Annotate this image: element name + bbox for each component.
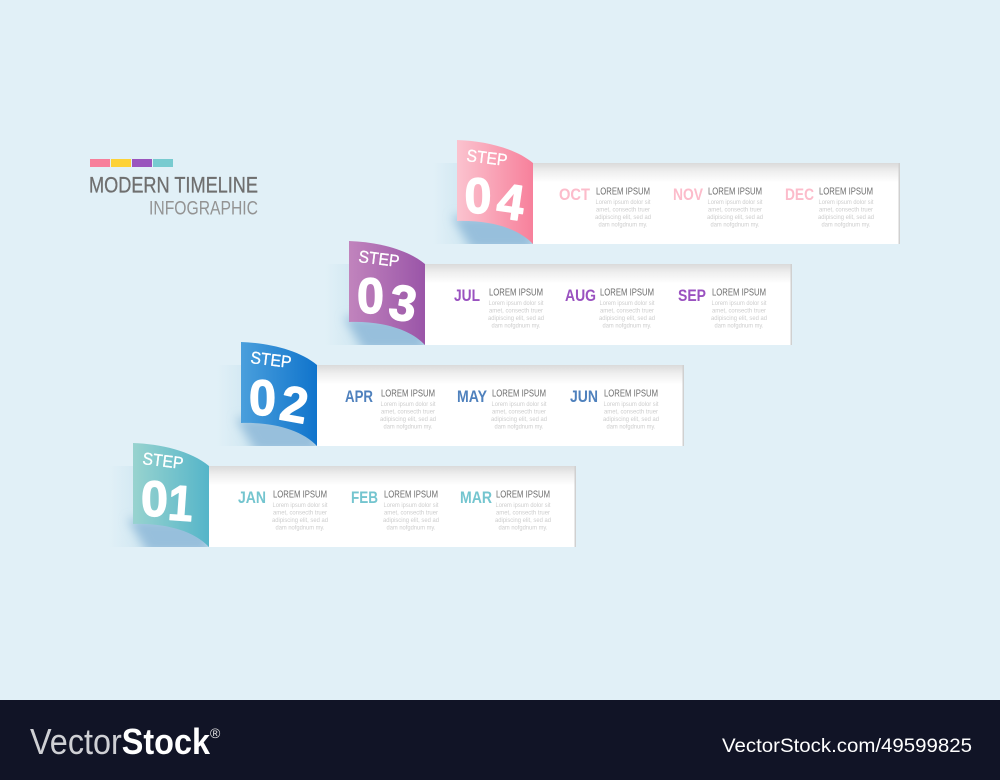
step 01 row [109,443,576,553]
month columns: LOREM IPSUM [489,288,543,298]
month columns: amet, consecth truer [708,206,762,214]
month columns: amet, consecth truer [712,308,766,314]
ribbon tab: 4 [493,172,528,232]
month columns: Lorem ipsum dolor sit [600,300,655,307]
month columns: LOREM IPSUM [381,388,435,400]
tab shadow [344,317,425,351]
month columns: DEC [785,185,814,204]
month columns: SEP [678,286,706,305]
month columns: amet, consecth truer [596,206,650,214]
panel [317,365,684,446]
month columns [559,185,874,228]
ribbon tab: STEP [250,348,293,372]
footer image id: VectorStock.com/49599825 [722,736,972,757]
month columns: FEB [351,488,378,507]
ribbon tab: 0 [249,370,276,426]
month columns: adipiscing elit, sed ad [599,315,655,322]
month columns: dam nofgdnum my. [606,424,656,430]
month columns: dam nofgdnum my. [602,322,652,330]
month columns: LOREM IPSUM [492,388,546,400]
month columns: Lorem ipsum dolor sit [818,199,874,206]
ribbon tab [133,443,209,547]
month columns: JUL [454,286,480,305]
month columns [345,387,659,430]
month columns: amet, consecth truer [384,510,438,516]
month columns: Lorem ipsum dolor sit [712,300,767,307]
panel [209,466,576,547]
month columns: dam nofgdnum my. [710,222,760,228]
month columns: Lorem ipsum dolor sit [604,401,659,408]
footer logo: VectorStock [30,721,211,762]
month columns: APR [345,387,373,406]
footer bar [0,700,1000,780]
step 03 row [325,241,792,351]
month columns: NOV [673,185,704,204]
month columns: dam nofgdnum my. [714,322,764,330]
month columns: Lorem ipsum dolor sit [380,401,436,408]
title block [89,159,258,220]
ribbon tab: 0 [141,471,168,527]
month columns: LOREM IPSUM [273,490,327,500]
month columns: dam nofgdnum my. [498,524,548,532]
month columns: dam nofgdnum my. [276,524,325,532]
month columns: LOREM IPSUM [819,186,873,198]
month columns: Lorem ipsum dolor sit [492,401,547,408]
tab glow [325,264,425,345]
month columns: LOREM IPSUM [604,388,658,400]
month columns: adipiscing elit, sed ad [603,416,659,423]
month columns: JAN [238,488,266,507]
month columns: Lorem ipsum dolor sit [272,502,328,509]
ribbon tab: STEP [358,247,401,271]
month columns: amet, consecth truer [381,408,435,416]
step 04 row [433,140,900,250]
ribbon tab: 0 [464,168,492,224]
month columns: dam nofgdnum my. [598,222,648,228]
heading: MODERN TIMELINE [89,172,258,198]
ribbon tab: 1 [166,475,195,532]
tab glow [433,163,533,244]
month columns: LOREM IPSUM [384,490,438,500]
month columns: amet, consecth truer [819,206,873,214]
month columns: Lorem ipsum dolor sit [384,502,439,509]
month columns: MAY [457,387,488,406]
panel [425,264,792,345]
month columns: amet, consecth truer [600,308,654,314]
month columns: Lorem ipsum dolor sit [496,502,551,509]
ribbon tab [349,241,425,345]
step 02 row [217,342,684,452]
month columns: amet, consecth truer [604,408,658,416]
tab shadow [452,216,533,250]
month columns: adipiscing elit, sed ad [491,416,547,423]
month columns: amet, consecth truer [273,510,327,516]
month columns: adipiscing elit, sed ad [495,517,551,524]
month columns: adipiscing elit, sed ad [595,214,651,221]
month columns: dam nofgdnum my. [492,322,541,330]
subheading: INFOGRAPHIC [149,198,258,220]
registered mark: ® [210,725,221,741]
month columns: adipiscing elit, sed ad [383,517,439,524]
ribbon tab: STEP [142,449,185,473]
ribbon tab: 2 [276,375,312,435]
month columns: Lorem ipsum dolor sit [708,199,763,206]
month columns: amet, consecth truer [492,408,546,416]
ribbon tab [241,342,317,446]
panel [533,163,900,244]
month columns: AUG [565,286,596,305]
month columns: LOREM IPSUM [596,186,650,198]
month columns: dam nofgdnum my. [822,222,871,228]
month columns [454,286,767,330]
month columns: adipiscing elit, sed ad [380,416,436,423]
month columns: LOREM IPSUM [600,288,654,298]
month columns: JUN [570,387,598,406]
month columns: adipiscing elit, sed ad [488,315,544,322]
month columns [238,488,551,532]
month columns: OCT [559,185,591,204]
month columns: Lorem ipsum dolor sit [488,300,544,307]
month columns: adipiscing elit, sed ad [711,315,767,322]
tab glow [217,365,317,446]
colour bars [90,159,173,167]
month columns: LOREM IPSUM [712,288,766,298]
tab shadow [128,519,209,553]
ribbon tab: 3 [385,274,421,333]
month columns: dam nofgdnum my. [384,424,433,430]
month columns: dam nofgdnum my. [494,424,544,430]
month columns: LOREM IPSUM [708,186,762,198]
month columns: MAR [460,488,492,507]
month columns: dam nofgdnum my. [386,524,436,532]
ribbon tab: 0 [357,268,384,324]
ribbon tab [457,140,533,244]
month columns: amet, consecth truer [489,308,543,314]
tab glow [109,466,209,547]
tab shadow [236,418,317,452]
month columns: amet, consecth truer [496,510,550,516]
ribbon tab: STEP [466,146,509,170]
month columns: Lorem ipsum dolor sit [596,199,651,206]
month columns: adipiscing elit, sed ad [272,517,328,524]
month columns: LOREM IPSUM [496,490,550,500]
month columns: adipiscing elit, sed ad [818,214,874,221]
month columns: adipiscing elit, sed ad [707,214,763,221]
